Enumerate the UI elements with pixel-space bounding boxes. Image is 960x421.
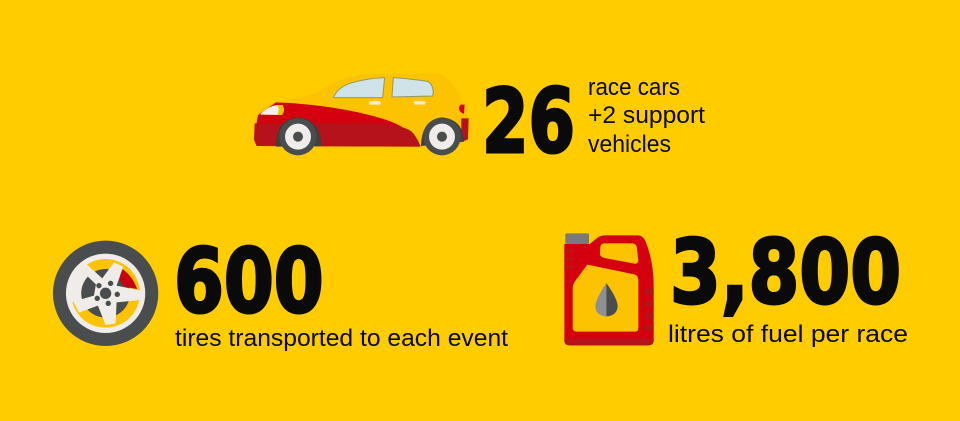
- text: race cars and support vehicles: race cars: [588, 74, 680, 101]
- rear wheel: [421, 117, 464, 155]
- canister body: [564, 235, 654, 345]
- canister handle hole: [600, 243, 638, 264]
- rear red panel: [461, 118, 469, 142]
- stat number: 26: 26: [482, 71, 575, 173]
- brake caliper: [120, 268, 137, 289]
- door handles: [369, 101, 381, 105]
- canister cap: [565, 233, 589, 244]
- neck ridges: [564, 249, 574, 269]
- windows: [334, 78, 385, 98]
- spokes: [73, 262, 141, 325]
- canister label area: [573, 265, 638, 332]
- stat number: 3,800: 3,800: [670, 222, 901, 325]
- icon: fuel canister: [564, 233, 654, 345]
- canister base: [564, 338, 654, 345]
- icon: race car: [254, 74, 469, 155]
- canister grip ridges: [645, 288, 654, 331]
- rear light: [459, 105, 465, 114]
- text: race cars and support vehicles: [588, 74, 705, 158]
- text: tires transported: tires transported to each event: [175, 325, 508, 352]
- text: litres of fuel: litres of fuel per race: [668, 321, 908, 348]
- car body: [254, 74, 469, 147]
- icon: tire: [53, 241, 158, 346]
- front wheel: [276, 117, 322, 155]
- car lower shade: [254, 123, 421, 147]
- text: race cars and support vehicles: +2 support: [588, 102, 705, 129]
- stat number: 600: 600: [174, 230, 324, 333]
- car red panel: [254, 102, 421, 147]
- headlight: [261, 105, 284, 115]
- oil drop: [595, 283, 618, 316]
- text: race cars and support vehicles: vehicles: [588, 131, 671, 158]
